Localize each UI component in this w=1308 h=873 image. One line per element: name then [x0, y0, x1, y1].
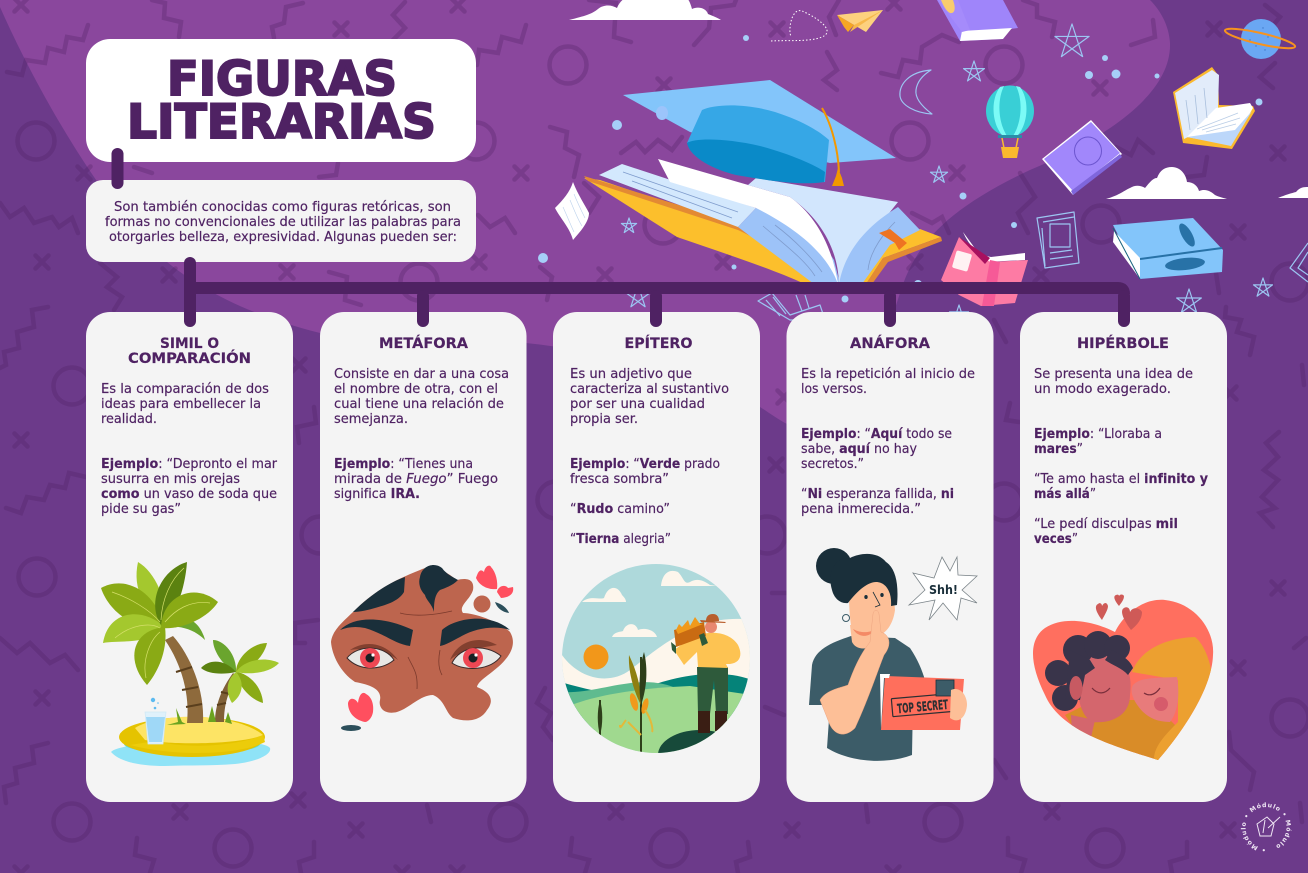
- text: simil definition: ideas para embellecer la: [101, 397, 261, 412]
- text: epitero definition: caracteriza al sustantivo: [570, 382, 729, 397]
- text: simil example: como un vaso de soda que: [101, 487, 277, 502]
- text: epitero examples: fresca sombra”: [570, 472, 669, 487]
- text: epitero definition: [570, 367, 729, 427]
- icon: pink book: [941, 232, 1028, 306]
- text: epitero definition: por ser una cualidad: [570, 397, 705, 412]
- icon: hot air balloon: [986, 86, 1034, 158]
- text: hiperbole examples: veces”: [1034, 532, 1078, 547]
- heading: anafora: ANÁFORA: [850, 335, 930, 352]
- text: simil example: susurra en mis orejas: [101, 472, 240, 487]
- text: hiperbole examples: Ejemplo: “Lloraba a: [1034, 427, 1162, 442]
- text: anafora examples: Ejemplo: “Aquí todo se: [801, 426, 952, 442]
- background light blob: [0, 0, 1170, 431]
- icon: purple book top: [937, 0, 1018, 41]
- intro text: formas no convencionales de utilizar las palabras para: [105, 215, 461, 230]
- panel: simil: [86, 312, 293, 802]
- icon: loose page: [555, 182, 589, 240]
- text: metafora definition: semejanza.: [334, 412, 408, 427]
- text: epitero examples: [570, 457, 720, 547]
- text: simil example: [101, 457, 277, 517]
- icon: blue book: [1113, 218, 1223, 279]
- text: anafora definition: los versos.: [801, 382, 867, 397]
- connector: title to intro: [112, 148, 124, 189]
- illustration: farmer in field: [562, 564, 750, 753]
- icon: outline book: [1037, 212, 1079, 268]
- timeline connector: [190, 288, 1124, 294]
- text: metafora definition: cual tiene una relación de: [334, 396, 504, 412]
- heading: epitero: EPÍTERO: [624, 335, 693, 352]
- text: anafora examples: secretos.”: [801, 457, 864, 472]
- heading: hiperbole: HIPÉRBOLE: [1077, 335, 1169, 352]
- connector: hiperbole: [1118, 290, 1130, 327]
- text: anafora examples: sabe, aquí no hay: [801, 441, 917, 457]
- floating dots: [538, 35, 1262, 302]
- text: hiperbole examples: mares”: [1034, 442, 1083, 457]
- connector: epitero: [650, 290, 662, 327]
- text: epitero examples: “Rudo camino”: [570, 502, 670, 517]
- text: hiperbole examples: [1034, 427, 1208, 547]
- illustration: couple in heart: [1033, 594, 1213, 765]
- text: epitero definition: propia ser.: [570, 412, 638, 427]
- icon: planet: [1224, 19, 1296, 59]
- text: metafora definition: el nombre de otra, con el: [334, 382, 498, 397]
- panel: epitero: [553, 312, 760, 802]
- text: hiperbole examples: “Le pedí disculpas mil: [1034, 516, 1178, 532]
- stamp text: TOP SECRET: [897, 698, 949, 717]
- text: anafora examples: pena inmerecida.”: [801, 502, 921, 517]
- text: hiperbole definition: [1034, 367, 1193, 397]
- illustration: open book and graduation cap: [584, 80, 942, 284]
- panel: intro box: [86, 180, 476, 262]
- text: metafora example: [334, 457, 498, 502]
- heading: simil: COMPARACIÓN: [128, 349, 251, 367]
- logo: Módulo: • Módulo • Módulo • Módulo: [1240, 802, 1292, 852]
- title: [127, 52, 436, 150]
- panel: metafora: [320, 312, 526, 802]
- text: simil definition: Es la comparación de dos: [101, 381, 269, 397]
- illustration: face with red eyes: [331, 565, 513, 731]
- icon: cloud right: [1106, 167, 1227, 199]
- icon: line stars: [621, 24, 1272, 323]
- intro text: Son también conocidas como figuras retóricas, son: [114, 199, 451, 215]
- intro text: [105, 199, 461, 245]
- text: simil definition: realidad.: [101, 412, 157, 427]
- speech bubble text: Shh!: [929, 583, 958, 597]
- text: hiperbole examples: más allá”: [1034, 486, 1096, 502]
- text: metafora example: significa IRA.: [334, 487, 420, 502]
- connector: intro to timeline: [184, 257, 196, 327]
- icon: open book right: [1173, 67, 1255, 149]
- text: hiperbole definition: Se presenta una idea de: [1034, 367, 1193, 382]
- heading: simil: SIMIL O: [160, 336, 219, 352]
- panel: title box: [86, 39, 476, 162]
- illustration: palm island: [101, 562, 279, 766]
- panel: hiperbole: [1020, 312, 1227, 802]
- panel: anafora: [786, 312, 994, 802]
- text: metafora definition: Consiste en dar a una cosa: [334, 367, 509, 382]
- title: LITERARIAS: [127, 95, 436, 150]
- text: anafora examples: [801, 426, 954, 517]
- text: epitero examples: “Tierna alegria”: [570, 532, 671, 547]
- heading: simil: [128, 336, 251, 367]
- text: anafora definition: Es la repetición al inicio de: [801, 366, 975, 382]
- intro text: otorgarles belleza, expresividad. Algunas pueden ser:: [109, 230, 457, 245]
- text: anafora definition: [801, 366, 975, 397]
- text: simil example: Ejemplo: “Depronto el mar: [101, 457, 277, 472]
- icon: moon outline: [900, 70, 932, 114]
- icon: paper plane: [771, 10, 883, 41]
- text: metafora example: mirada de Fuego” Fuego: [334, 472, 498, 487]
- text: hiperbole examples: “Te amo hasta el infinito y: [1034, 472, 1208, 487]
- text: hiperbole definition: un modo exagerado.: [1034, 382, 1171, 397]
- text: metafora definition: [334, 367, 509, 427]
- illustration: woman with top secret folder: [809, 548, 977, 761]
- icon: flat purple book: [1042, 120, 1122, 195]
- connector: metafora: [417, 290, 429, 327]
- text: metafora example: Ejemplo: “Tienes una: [334, 457, 473, 472]
- icon: outline book edge: [1290, 243, 1308, 282]
- icon: outline open book: [758, 293, 825, 320]
- title: FIGURAS: [167, 52, 397, 107]
- icon: cloud edge: [1278, 187, 1308, 198]
- text: epitero examples: Ejemplo: “Verde prado: [570, 457, 720, 472]
- text: simil definition: [101, 381, 269, 427]
- heading: metafora: METÁFORA: [379, 335, 468, 352]
- text: simil example: pide su gas”: [101, 502, 181, 517]
- icon: cloud top: [569, 0, 721, 20]
- connector: anafora: [884, 290, 896, 327]
- text: anafora examples: “Ni esperanza fallida, ni: [801, 487, 954, 502]
- text: epitero definition: Es un adjetivo que: [570, 367, 692, 382]
